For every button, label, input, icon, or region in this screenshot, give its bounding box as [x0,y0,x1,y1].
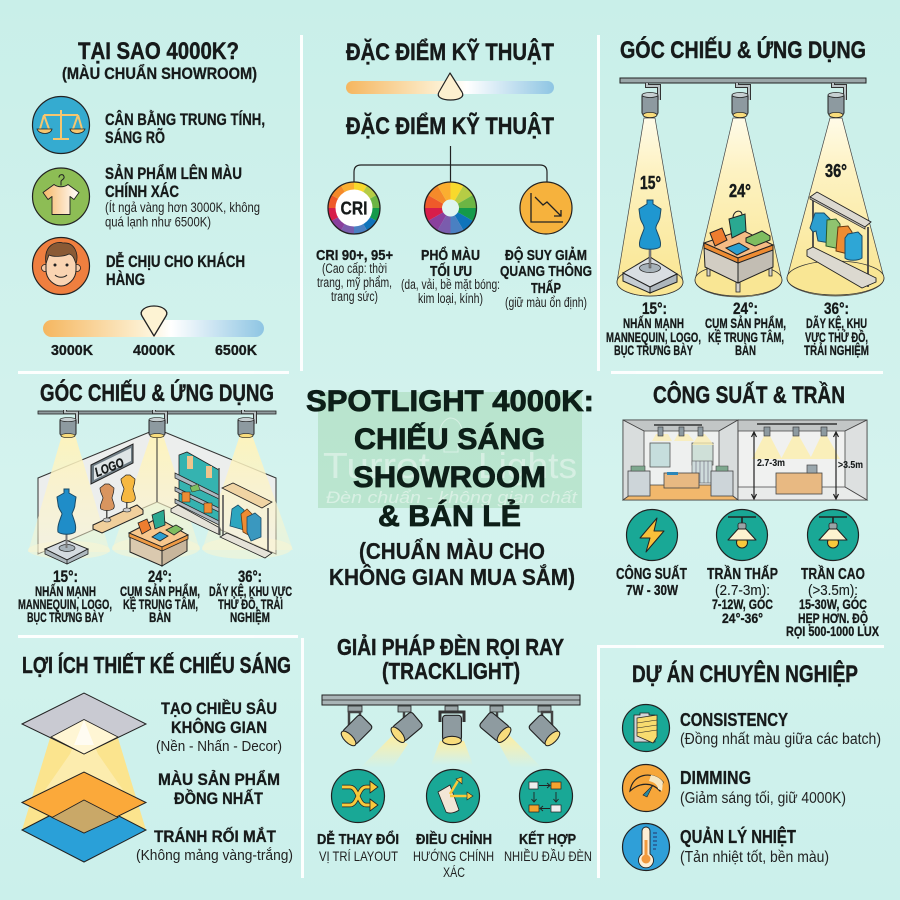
logo sign: LOGO [93,455,126,480]
text: high ceiling: 15-30W, GÓC [799,597,867,612]
text: lumen decay [500,246,592,310]
heading: GÓC CHIẾU & ỨNG DỤNG [40,379,274,407]
panel: tracklight solutions [317,632,592,880]
item text: balanced: CÂN BẰNG TRUNG TÍNH, [105,110,265,129]
text: easy change [317,830,399,864]
heading: (TRACKLIGHT) [382,658,520,684]
text: adjust: XÁC [443,864,465,880]
item text: comfortable [106,252,245,289]
text: depth: (Nền - Nhấn - Decor) [156,738,282,755]
colour temperature scale: 3000K [51,343,94,359]
caption: 15 degrees: 15°: [53,568,78,586]
text: avoid glare [136,826,293,864]
item text: balanced: SÁNG RÕ [105,127,165,147]
text: CRI: CRI 90+, 95+ [316,248,393,264]
caption: 24 degrees: CỤM SẢN PHẨM, [120,584,200,599]
text: low ceiling [707,566,778,626]
colour temperature scale: 6500K [215,343,258,359]
panel: wattage and ceiling [616,381,879,639]
caption: 15 degrees: 15°: [642,300,667,318]
text: consistency: (Đồng nhất màu giữa các batch) [680,731,881,748]
colour temperature scale [43,306,264,359]
text: spectrum: kim loại, kính) [418,291,483,306]
display bench with mannequins [93,475,143,533]
text: CRI [316,248,393,304]
text: lumen decay: (giữ màu ổn định) [505,295,587,310]
text: adjust: ĐIỀU CHỈNH [416,831,492,848]
beam 15 degrees with mannequin [617,83,683,296]
panel: why 4000K [32,38,265,359]
text: lumen decay: THẤP [531,280,561,297]
wall shelving [171,452,220,535]
icon: low ceiling pendant [716,510,768,560]
centre title block [306,385,594,590]
text: thermal management: (Tản nhiệt tốt, bền màu) [680,849,829,866]
heading [337,632,564,684]
colour temperature scale: 4000K [133,343,176,359]
caption: 36 degrees [804,300,869,358]
caption: 36 degrees: THỬ ĐỒ, TRẢI [218,597,283,612]
text: product colour: MÀU SẢN PHẨM [158,770,280,789]
caption: 15 degrees [606,300,701,358]
icon: lumen decay chart [520,182,572,234]
caption: 15 degrees: MANNEQUIN, LOGO, [606,330,701,345]
low ceiling room illustration [623,420,738,500]
watermark: Lights [478,445,577,486]
caption: 15 degrees [18,568,112,625]
icon: CRI ring [328,182,380,234]
high ceiling room illustration: >3.5m [838,459,863,471]
icon: CRI ring: CRI [340,198,368,218]
caption: 24 degrees: 24°: [733,300,758,318]
heading: why 4000K: TẠI SAO 4000K? [78,38,239,65]
text: combine [504,831,592,864]
heading: LỢI ÍCH THIẾT KẾ CHIẾU SÁNG [22,651,291,678]
text: high ceiling: (>3.5m): [808,582,858,599]
caption: 36 degrees: NGHIỆM [230,610,270,625]
track rail with five spotlights [322,695,580,768]
icon: colour wheel [424,182,476,234]
text: lumen decay: QUANG THÔNG [500,262,592,280]
item text: accurate colour: (Ít ngả vàng hơn 3000K, không [105,199,260,215]
track rail with spotlights [38,410,276,438]
heading: why 4000K [62,38,257,83]
watermark [318,392,582,508]
panel: lighting design benefits [22,651,293,864]
text: spectrum [401,246,500,306]
icon: balance scale [32,96,90,154]
heading: ĐẶC ĐIỂM KỸ THUẬT [346,38,554,66]
text: thermal management [680,826,829,866]
main title: SHOWROOM [353,461,546,494]
room walls [38,429,276,554]
text: high ceiling: TRẦN CAO [801,566,865,583]
caption: 15 degrees: BỤC TRƯNG BÀY [27,610,104,625]
heading: CÔNG SUẤT & TRẦN [653,381,845,409]
beam 24 degrees with table: 24° [729,181,751,201]
subtitle [329,537,575,590]
text: spectrum: PHỔ MÀU [421,246,480,264]
caption: 36 degrees: 36°: [824,300,849,318]
text: high ceiling: HẸP HƠN. ĐỘ [798,611,868,626]
main title [306,385,594,533]
text: wattage: 7W - 30W [626,583,678,599]
text: low ceiling: TRẦN THẤP [707,566,778,583]
icon: consistency clipboard [622,704,670,752]
caption: 36 degrees: TRẢI NGHIỆM [804,343,869,358]
text: easy change: DỄ THAY ĐỔI [317,830,399,848]
heading: why 4000K: (MÀU CHUẨN SHOWROOM) [62,64,257,83]
item text: comfortable: DỄ CHỊU CHO KHÁCH [106,252,245,271]
text: lumen decay: ĐỘ SUY GIẢM [505,246,587,264]
item text: comfortable: HÀNG [106,270,145,289]
panel: showroom scene [18,379,293,625]
text: combine: NHIỀU ĐẦU ĐÈN [504,848,592,864]
track rail [620,78,866,83]
text: thermal management: QUẢN LÝ NHIỆT [680,826,796,847]
foreground mannequin [45,489,88,564]
corner line [156,429,158,502]
caption: 15 degrees: MANNEQUIN, LOGO, [18,597,112,612]
beam 24 degrees with table [695,83,782,297]
icon: dimming gauge [622,764,670,812]
text: low ceiling: 24°-36° [722,611,763,626]
text: low ceiling: (2.7-3m): [715,582,770,599]
caption: 24 degrees: BÀN [735,343,756,358]
text: depth: TẠO CHIỀU SÂU [161,699,277,718]
icon: high ceiling pendant [808,510,858,560]
text: avoid glare: TRÁNH RỐI MẮT [154,826,276,846]
caption: 36 degrees: DÃY KỆ, KHU [806,316,867,331]
text: consistency [680,710,881,748]
text: adjust: HƯỚNG CHÍNH [413,848,494,864]
watermark: Đèn chuẩn - không gian chất [326,488,578,507]
text: low ceiling: 7-12W, GÓC [712,597,773,612]
text: high ceiling: RỌI 500-1000 LUX [786,624,879,639]
caption: 24 degrees: BÀN [149,610,171,625]
centre table [129,510,188,566]
item text: accurate colour: SẢN PHẨM LÊN MÀU [105,164,242,183]
icon: t-shirt [32,168,90,225]
caption: 24 degrees: KỆ TRUNG TÂM, [123,597,198,612]
beam 36 degrees with clothing rack [787,83,884,296]
text: CRI: trang, mỹ phẩm, [317,275,392,290]
text: depth: KHÔNG GIAN [171,718,267,737]
icon: customer face [32,238,90,294]
high ceiling room illustration [738,420,867,500]
item text: accurate colour: quá lạnh như 6500K) [105,214,211,230]
caption: 24 degrees: CỤM SẢN PHẨM, [705,316,786,331]
text: wattage: CÔNG SUẤT [616,565,687,583]
item text: balanced [105,110,265,147]
text: dimming: DIMMING [680,768,751,788]
subtitle: KHÔNG GIAN MUA SẮM) [329,563,575,590]
colour temperature bar [346,73,554,100]
text: adjust [413,831,494,880]
high ceiling room illustration: 2.7-3m [757,457,785,469]
text: high ceiling [786,566,879,639]
watermark: Turret [323,445,430,486]
subtitle: (CHUẨN MÀU CHO [359,537,545,564]
panel: professional projects [622,660,881,870]
text: spectrum: TỐI ƯU [430,262,472,280]
soft light beams [28,435,293,559]
text: product colour: ĐỒNG NHẤT [174,789,263,808]
beam 36 degrees with clothing rack: 36° [825,161,847,181]
text: avoid glare: (Không mảng vàng-trắng) [136,847,293,864]
text: CRI: trang sức) [331,289,378,304]
item text: accurate colour [105,164,260,230]
connector tree [354,146,547,182]
text: combine: KẾT HỢP [519,831,576,848]
text: spectrum: (da, vải, bề mặt bóng: [401,277,500,292]
caption: 24 degrees [705,300,786,358]
beam 15 degrees with mannequin: 15° [640,173,661,193]
caption: 24 degrees [120,568,200,625]
icon: lightning bolt [626,510,678,560]
icon: combination flow [520,770,572,822]
caption: 36 degrees: DÃY KỆ, KHU VỰC [209,584,292,599]
caption: 24 degrees: KỆ TRUNG TÂM, [708,330,784,345]
text: depth [156,699,282,755]
icon: shuffle arrows [332,770,384,822]
text: dimming: (Giảm sáng tối, giữ 4000K) [680,790,846,807]
text: consistency: CONSISTENCY [680,710,788,730]
second heading: ĐẶC ĐIỂM KỸ THUẬT [346,112,554,140]
caption: 36 degrees [209,568,292,625]
icon: thermometer [622,824,670,870]
panel: technical features [316,38,592,310]
caption: 36 degrees: 36°: [238,568,262,586]
caption: 15 degrees: NHẤN MẠNH [35,584,96,599]
heading: GIẢI PHÁP ĐÈN RỌI RAY [337,632,564,660]
main title: SPOTLIGHT 4000K: [306,385,594,418]
text: wattage [616,565,687,599]
panel: beam angle and applications [606,36,884,358]
icon: adjust direction [426,770,480,822]
text: dimming [680,768,846,807]
main title: CHIẾU SÁNG [354,422,545,456]
caption: 15 degrees: NHẤN MẠNH [623,316,684,331]
caption: 15 degrees: BỤC TRƯNG BÀY [614,343,693,358]
stacked layers diagram [22,693,146,862]
item text: accurate colour: CHÍNH XÁC [105,182,179,201]
main title: & BÁN LẺ [378,499,521,533]
caption: 36 degrees: VỰC THỬ ĐỒ, [805,330,868,345]
text: CRI: (Cao cấp: thời [322,261,387,276]
clothing rack [220,483,272,558]
caption: 24 degrees: 24°: [148,568,172,586]
logo sign [91,444,133,484]
text: product colour [158,770,280,808]
text: easy change: VỊ TRÍ LAYOUT [319,848,398,864]
